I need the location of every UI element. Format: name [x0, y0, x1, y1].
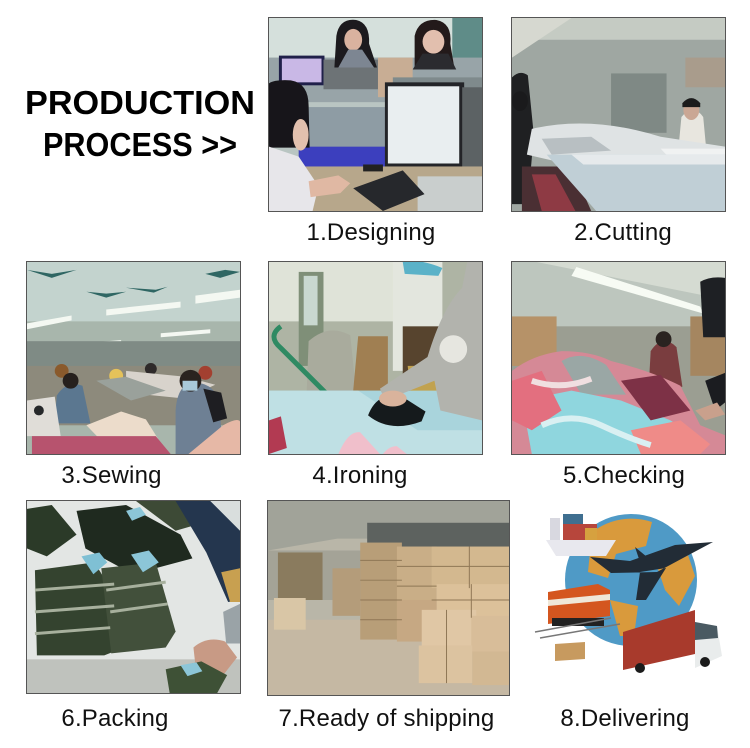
icon: parcel	[555, 642, 585, 661]
panel: cutting photo	[511, 17, 726, 212]
label: packing: 6.Packing	[61, 705, 169, 732]
panel: ironing photo	[268, 261, 483, 455]
label: checking: 5.Checking	[563, 462, 685, 489]
label: shipping: 7.Ready of shipping	[279, 705, 494, 732]
panel: warehouse photo	[267, 500, 510, 696]
label: ironing: 4.Ironing	[312, 462, 408, 489]
icon: train	[535, 584, 620, 638]
panel: designing photo	[268, 17, 483, 212]
title: PROCESS >>	[43, 126, 237, 163]
icon: truck	[623, 610, 722, 673]
panel: checking photo	[511, 261, 726, 455]
title	[25, 84, 255, 163]
label: sewing: 3.Sewing	[61, 462, 162, 489]
panel: sewing photo	[26, 261, 241, 455]
label: designing: 1.Designing	[307, 219, 435, 246]
panel: packing photo	[26, 500, 241, 694]
title: PRODUCTION	[25, 84, 255, 121]
label: cutting: 2.Cutting	[574, 219, 672, 246]
icon: globe	[565, 514, 697, 646]
label: delivering: 8.Delivering	[560, 705, 690, 732]
icon: airplane	[590, 542, 713, 600]
illustration: delivering globe, plane, ship, train, truck	[534, 514, 722, 673]
icon: cargo ship	[546, 514, 616, 556]
